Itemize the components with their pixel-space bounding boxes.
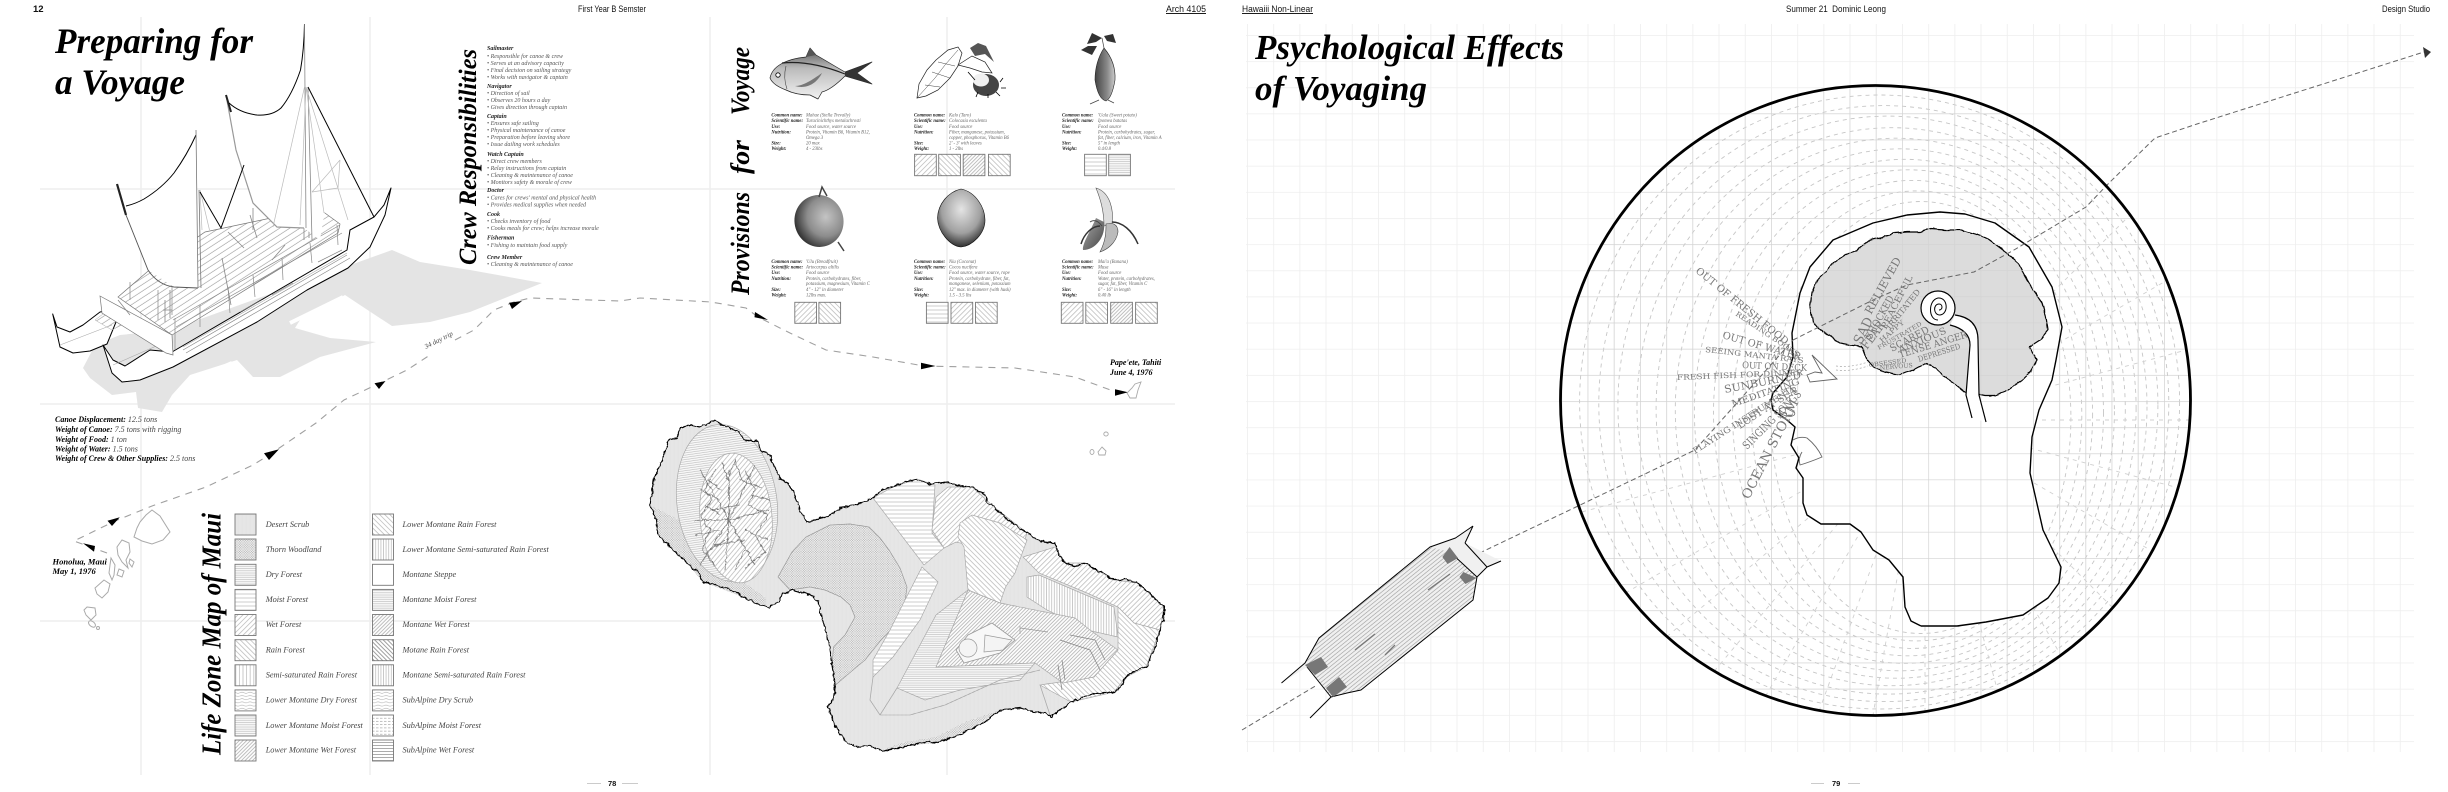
legend: life zones: SubAlpine Dry Scrub (402, 696, 473, 704)
food facts: sweet potato: Scientific name: (1062, 119, 1094, 124)
canoe weight stats: Weight of Canoe: 7.5 tons with rigging (55, 425, 181, 434)
sensory word rays: LOST AT SEA (1736, 385, 1799, 432)
food facts: banana: Use: (1062, 271, 1071, 276)
food facts: breadfruit: 4" - 12" in diameter (806, 288, 844, 293)
food facts: fish: 4 - 23lbs (806, 147, 823, 152)
food facts: breadfruit: potassium, magnesium, Vitamin C (805, 282, 871, 287)
legend: life zones: Lower Montane Rain Forest (402, 520, 497, 529)
crew responsibilities list: • Physical maintenance of canoe (487, 127, 566, 134)
canoe outline (1282, 526, 1501, 718)
rigging lines (200, 87, 348, 230)
crew responsibilities list: • Responsible for canoe & crew (487, 53, 563, 60)
rain forest (958, 515, 1027, 603)
large rear sail (226, 24, 335, 240)
legend: life zones: Dry Forest (265, 570, 303, 579)
sensory word rays: FRESH FISH FOR DINNER (1677, 368, 1803, 382)
heading: Life Zone Map of Maui: Life Zone Map of Maui (196, 513, 226, 756)
food facts: sweet potato: Food source (1097, 125, 1121, 130)
emotion word rays in brain: IRRITATED (1885, 288, 1922, 331)
food facts: fish: Protein, Vitamin B6, Vitamin B12, (805, 130, 870, 136)
emotion word rays in brain: SHOCKED (1864, 294, 1897, 341)
crew responsibilities list: Doctor (486, 188, 505, 194)
food: taro (917, 43, 1006, 98)
label: Honolua, Maui (52, 556, 107, 576)
food facts: banana: Weight: (1062, 294, 1077, 298)
food facts: taro: Use: (914, 125, 923, 130)
head silhouette fill (1771, 212, 2062, 626)
left page grid lines (40, 17, 1175, 775)
emotion word rays in brain: SCARED (1888, 325, 1931, 355)
food: fish (770, 48, 872, 99)
food facts: fish: Weight: (771, 147, 787, 152)
food facts: sweet potato: Protein, carbohydrates, sugar, (1097, 130, 1155, 136)
page headers: Summer 21 Dominic Leong (1786, 4, 1886, 15)
food facts: breadfruit: Food source (805, 271, 829, 276)
food facts: taro: 2' - 3' with leaves (949, 142, 982, 146)
emotion word rays in brain: FEAR (1858, 318, 1889, 352)
canoe weight stats: Weight of Crew & Other Supplies: 2.5 tons (55, 454, 195, 463)
outer circle (1560, 86, 2190, 716)
far east rain zone (1040, 607, 1160, 702)
food facts: taro: copper, phosphorus, Vitamin B6 (949, 136, 1010, 141)
eye (1807, 355, 1837, 382)
legend: life zones: SubAlpine Moist Forest (402, 721, 482, 730)
heading: Provisions for Voyage: for (726, 139, 755, 174)
food facts: banana: Food source (1097, 271, 1121, 276)
food facts: coconut: Nutrition: (913, 277, 934, 282)
emotion word rays in brain: HAPPY (1878, 318, 1906, 345)
wet forest north (932, 487, 1027, 557)
emotion word rays in brain: PEACEFUL (1880, 274, 1915, 331)
Haleakala upper slopes (936, 590, 1118, 683)
upland contour (870, 670, 1050, 715)
lips (1793, 437, 1822, 465)
crew responsibilities list: • Cooks meals for crew; helps increase morale (487, 225, 599, 232)
food facts: fish: Scientific name: (771, 119, 803, 124)
legend: life zones: Semi-saturated Rain Forest (266, 670, 358, 680)
food facts: banana: Common name: (1062, 260, 1094, 265)
legend: life zones: Lower Montane Dry Forest (265, 696, 358, 704)
sensory word rays: OUT ON DECK (1742, 361, 1808, 374)
page headers: First Year B Semster (578, 4, 646, 15)
west Maui wet forest (694, 450, 778, 586)
sensory word rays: SEEING MANTA RAYS (1705, 345, 1804, 365)
emotion word rays in brain: TENSE ANGER (1898, 329, 1970, 361)
food facts: breadfruit: Common name: (771, 260, 803, 265)
Hawaiian islands outlines (84, 510, 170, 630)
emotion word rays in brain: ANXIOUS (1896, 326, 1948, 356)
deck details (1355, 574, 1450, 655)
sensory word rays: OCEAN STORM (1739, 397, 1803, 502)
food zone swatches (795, 154, 1157, 323)
crew responsibilities list: • Gives direction through captain (487, 105, 567, 111)
legend: life zones: Moist Forest (265, 595, 309, 604)
food facts: sweet potato: Ipomea batatas (1097, 119, 1127, 124)
legend: life zones: Montane Moist Forest (402, 595, 477, 604)
emotion word rays in brain: DEPRESSED (1917, 342, 1961, 364)
crew responsibilities list: Cook (487, 212, 500, 218)
food facts: coconut: Cocos nucifera (949, 266, 978, 270)
food facts: breadfruit: 'Ulu (Breadfruit) (806, 260, 838, 265)
grid inside circle (1560, 86, 2190, 716)
front sail (117, 130, 198, 288)
crew responsibilities list: • Serves at an advisory capacity (487, 61, 564, 67)
page number 79: 79 (1832, 779, 1840, 788)
page headers: 12 (33, 4, 44, 15)
food facts: breadfruit: Weight: (771, 294, 787, 298)
food facts: taro (913, 114, 1010, 152)
food facts: breadfruit (770, 260, 871, 298)
voyage arrowhead (2423, 47, 2431, 58)
crater cinder cones (959, 626, 1048, 657)
crew responsibilities list: Navigator (486, 84, 512, 90)
food facts: taro: Nutrition: (913, 130, 934, 136)
legend: life zones: Montane Semi-saturated Rain Forest (402, 670, 526, 680)
canoe weight stats: Weight of Food: 1 ton (55, 435, 127, 444)
food facts: banana: Water, protein, carbohydrates, (1098, 277, 1155, 282)
crew responsibilities list: • Observes 20 hours a day (487, 98, 551, 104)
page headers (33, 4, 2430, 15)
west coast strip (650, 505, 766, 607)
label: Honolua, Maui: Honolua, Maui (52, 556, 107, 566)
cochlea spiral (1921, 291, 1955, 325)
sensory word rays: SINGING SONGS (1740, 388, 1804, 452)
food facts: coconut: Protein, carbohydrate, fiber, fat, (948, 277, 1010, 282)
food facts: fish: Nutrition: (770, 130, 791, 136)
page headers: Arch 4105 (1166, 4, 1206, 15)
food facts: breadfruit: Scientific name: (771, 266, 803, 270)
food facts: taro: Food source (948, 125, 972, 130)
railings and posts (130, 225, 350, 353)
crew responsibilities list: • Direction of sail (487, 90, 530, 97)
food facts: coconut: Common name: (914, 260, 946, 265)
food facts: fish: Common name: (771, 114, 803, 118)
food facts: taro: 1 - 2lbs (949, 147, 963, 152)
legend: life zones: Thorn Woodland (266, 545, 322, 554)
legend: life zones: Wet Forest (266, 620, 302, 629)
canoe ground shadow (83, 250, 542, 412)
food facts: banana: sugar, fat, fiber, Vitamin C (1098, 282, 1148, 287)
legend: life zones: Lower Montane Semi-saturated Rain Forest (402, 545, 549, 554)
label: Pape'ete, Tahiti: Pape'ete, Tahiti (1110, 358, 1162, 367)
crew responsibilities list: • Cleaning & maintenance of canoe (487, 172, 573, 179)
legend: life zones: Motane Rain Forest (402, 646, 470, 654)
food facts: sweet potato: Use: (1062, 125, 1071, 130)
page number 78 (587, 779, 638, 788)
voyage route dashed path (74, 298, 1116, 553)
route arrowheads (83, 301, 1128, 552)
food facts: coconut: Size: (914, 288, 924, 293)
page headers: Hawaiii Non-Linear (1242, 4, 1313, 15)
semi-saturated zone (1027, 575, 1118, 637)
sensory word rays: OUT OF WATER (1721, 330, 1803, 363)
food facts: sweet potato: Common name: (1062, 114, 1094, 118)
food facts: banana: Mai'a (Banana) (1097, 260, 1128, 265)
canoe deck (1282, 526, 1501, 718)
crew responsibilities list: Fisherman (487, 236, 515, 242)
food facts: banana: Scientific name: (1062, 266, 1094, 270)
black stays (200, 165, 244, 228)
crew responsibilities list: • Final decision on sailing strategy (487, 68, 572, 74)
food facts: coconut: Niu (Coconut) (948, 260, 976, 265)
food facts: taro: Common name: (914, 114, 946, 118)
title: Psychological Effects of Voyaging: Psychological Effects (1254, 28, 1564, 67)
food facts: taro: Fiber, manganese, potassium, (948, 130, 1005, 136)
sensory word rays: SUNBURNED (1723, 369, 1802, 396)
food facts: fish: Use: (771, 125, 781, 130)
title: Preparing for a Voyage: Preparing for (54, 21, 254, 61)
legend: life zones: Lower Montane Wet Forest (265, 746, 357, 754)
emotion word rays in brain: NERVOUS (1880, 362, 1913, 372)
food facts: sweet potato: 0.4/0.8 (1098, 147, 1112, 152)
food facts: banana: 6" - 16" in length (1098, 288, 1131, 293)
legend: life zones: Lower Montane Moist Forest (265, 721, 364, 730)
food: banana (1081, 188, 1138, 252)
page number 79 (1811, 779, 1860, 788)
crew responsibilities list: • Works with navigator & captain (487, 75, 568, 81)
food facts: sweet potato (1061, 114, 1162, 152)
crew responsibilities list: Watch Captain (487, 152, 524, 158)
brain (1810, 229, 2048, 395)
food facts: sweet potato: fat, fiber, calcium, iron, Vitamin A (1098, 136, 1162, 141)
emotion word rays in brain: FRUSTRATED (1876, 321, 1923, 352)
canoe weight stats: Weight of Water: 1.5 tons (55, 444, 138, 454)
crew responsibilities list: • Checks inventory of food (487, 218, 551, 225)
crew responsibilities list: Captain (487, 114, 507, 120)
food facts: sweet potato: Weight: (1062, 147, 1077, 152)
crew responsibilities list: • Fishing to maintain food supply (487, 242, 568, 249)
canoe weight stats (55, 415, 195, 463)
crew responsibilities list: Sailmaster (487, 46, 514, 52)
south coast dotted strip (881, 710, 1000, 750)
food facts: coconut (913, 260, 1011, 298)
crew responsibilities list: • Preparation before leaving shore (487, 134, 570, 141)
food facts: sweet potato: 5" in length (1098, 142, 1121, 146)
lower montane band (897, 590, 1035, 700)
food facts: fish: 20 max (806, 142, 821, 146)
title: Preparing for a Voyage: a Voyage (55, 62, 185, 102)
front hull (103, 188, 391, 382)
crew responsibilities list: • Issue dailing work schedules (487, 142, 560, 148)
food facts: breadfruit: Artocarpus altilis (805, 266, 839, 270)
label: Honolua, Maui: May 1, 1976 (52, 566, 96, 576)
food facts: fish: Food source, water source (805, 125, 856, 130)
food facts: sweet potato: Size: (1062, 142, 1072, 146)
eye sight lines to brain (1836, 362, 1868, 370)
gray hull caps (1305, 547, 1476, 697)
heading: Provisions for Voyage: Provisions (726, 192, 755, 296)
emotion word rays in brain: SAD (1851, 315, 1877, 347)
canoe illustration (53, 24, 391, 382)
legend: life zones: Desert Scrub (265, 520, 309, 529)
food facts: fish: Mahae (Stella Trevally) (805, 114, 851, 118)
food facts: breadfruit: Nutrition: (770, 277, 791, 282)
sensory word rays: PLAYING INSTRUMENTS (1691, 383, 1799, 457)
sensory word rays: MEDITATING (1731, 377, 1801, 410)
crew responsibilities list: • Monitors safety & morale of crew (487, 179, 572, 186)
nostril (1778, 406, 1796, 418)
page number 78: 78 (608, 779, 616, 788)
crew responsibilities list: • Ensures safe sailing (487, 120, 539, 127)
spine and inner ear (1921, 291, 1986, 422)
crew responsibilities list (486, 46, 599, 268)
food facts: coconut: 12" max. in diameter (with husk) (949, 288, 1011, 293)
food facts: breadfruit: Size: (771, 288, 781, 293)
moist forest north (873, 479, 944, 565)
food facts: coconut: Use: (914, 271, 923, 276)
food facts: taro: Colocasia esculenta (949, 119, 988, 124)
small canoe plan view (1282, 526, 1501, 718)
west Maui ridges (695, 460, 770, 570)
crater (956, 623, 1015, 663)
sensory word rays: OUT OF FRESH FOOD (1693, 266, 1790, 347)
canoe weight stats: Canoe Displacement: 12.5 tons (55, 415, 157, 424)
food facts: coconut: Scientific name: (914, 266, 946, 270)
food facts: coconut: Food source, water source, rope (948, 271, 1010, 276)
legend: life zones: Montane Wet Forest (402, 620, 470, 629)
food facts: taro: Size: (914, 142, 924, 146)
legend: life zones (235, 514, 549, 761)
food facts: banana: Size: (1062, 288, 1072, 293)
sailor figures (118, 208, 309, 322)
food facts: taro: Kalo (Taro) (948, 114, 971, 118)
food: coconut (938, 189, 985, 247)
ridge shading (1058, 635, 1105, 690)
crew responsibilities list: • Cares for crews' mental and physical health (487, 194, 596, 202)
food: breadfruit (790, 187, 848, 252)
emotion word rays in brain: OBSESSED (1868, 357, 1907, 369)
food facts: fish: Omega 3 (806, 136, 824, 141)
island base (650, 420, 1164, 751)
food facts: coconut: manganese, selenium, potassium (949, 282, 1011, 287)
food facts: sweet potato: Nutrition: (1061, 130, 1082, 136)
legend: life zones: Montane Steppe (402, 570, 457, 579)
legend: life zones: SubAlpine Wet Forest (402, 746, 475, 754)
label: 34 day trip: 34 day trip (422, 329, 455, 351)
concentric dashed field (1579, 94, 2188, 714)
emotion word rays in brain: RELIEVED (1862, 255, 1904, 316)
page headers: Design Studio (2382, 4, 2430, 15)
food facts: fish: Turacinichthys metalachrosti (806, 119, 861, 124)
head outline (1771, 212, 2062, 626)
food facts: banana: Nutrition: (1061, 277, 1082, 282)
food facts: banana (1061, 260, 1155, 298)
thorn woodland zone (778, 524, 907, 685)
rear hull (53, 310, 116, 353)
crew responsibilities list: • Relay instructions from captain (487, 165, 566, 172)
coastline (650, 420, 1164, 751)
food facts: breadfruit: 12lbs max. (806, 294, 826, 298)
Maui life zone map (650, 418, 1164, 751)
food facts: banana: 0.40 lb (1098, 294, 1112, 298)
sensory word rays (1677, 266, 1808, 502)
voyage dashed line (1242, 52, 2424, 730)
food facts: breadfruit: Protein, carbohydrates, fiber, (805, 277, 861, 282)
food facts: breadfruit: Use: (771, 271, 781, 276)
sensory word rays: READING BOOKS (1734, 310, 1801, 359)
heading: Provisions for Voyage (726, 47, 755, 296)
Tahiti island outlines (1090, 382, 1141, 455)
title: Psychological Effects of Voyaging (1254, 28, 1564, 108)
food facts: taro: Scientific name: (914, 119, 946, 124)
label: Pape'ete, Tahiti: June 4, 1976 (1109, 368, 1152, 377)
front crossbeam (100, 296, 173, 355)
deck planks (118, 208, 340, 335)
crew responsibilities list: • Cleaning & maintenance of canoe (487, 261, 573, 268)
crew responsibilities list: • Direct crew members (487, 159, 542, 165)
food facts: sweet potato: 'Uala (Sweet potato) (1098, 114, 1137, 118)
food facts: coconut: 1.5 - 3.5 lbs (949, 294, 971, 298)
east wet forest (1023, 547, 1164, 630)
legend: life zones: Rain Forest (265, 646, 305, 654)
title: Psychological Effects of Voyaging: of Voyaging (1255, 69, 1427, 108)
crew responsibilities list: • Provides medical supplies when needed (487, 202, 587, 208)
moist strip (873, 567, 938, 677)
heading: Provisions for Voyage: Voyage (726, 47, 755, 115)
label: Pape'ete, Tahiti (1109, 358, 1162, 377)
crew responsibilities list: Crew Member (487, 255, 523, 261)
food: sweet potato (1081, 33, 1116, 104)
food facts: fish: Size: (771, 142, 781, 146)
food facts: fish (770, 114, 870, 152)
west Maui contour (666, 418, 788, 588)
food facts: banana: Musa (1097, 266, 1109, 270)
title: Preparing for a Voyage (54, 21, 254, 102)
emotion word rays in brain (1851, 255, 1970, 372)
food facts: coconut: Weight: (914, 294, 929, 298)
food facts: taro: Weight: (914, 147, 929, 152)
right page background grid (1246, 24, 2414, 752)
heading: Crew Responsibilities: Crew Responsibilities (455, 49, 482, 265)
